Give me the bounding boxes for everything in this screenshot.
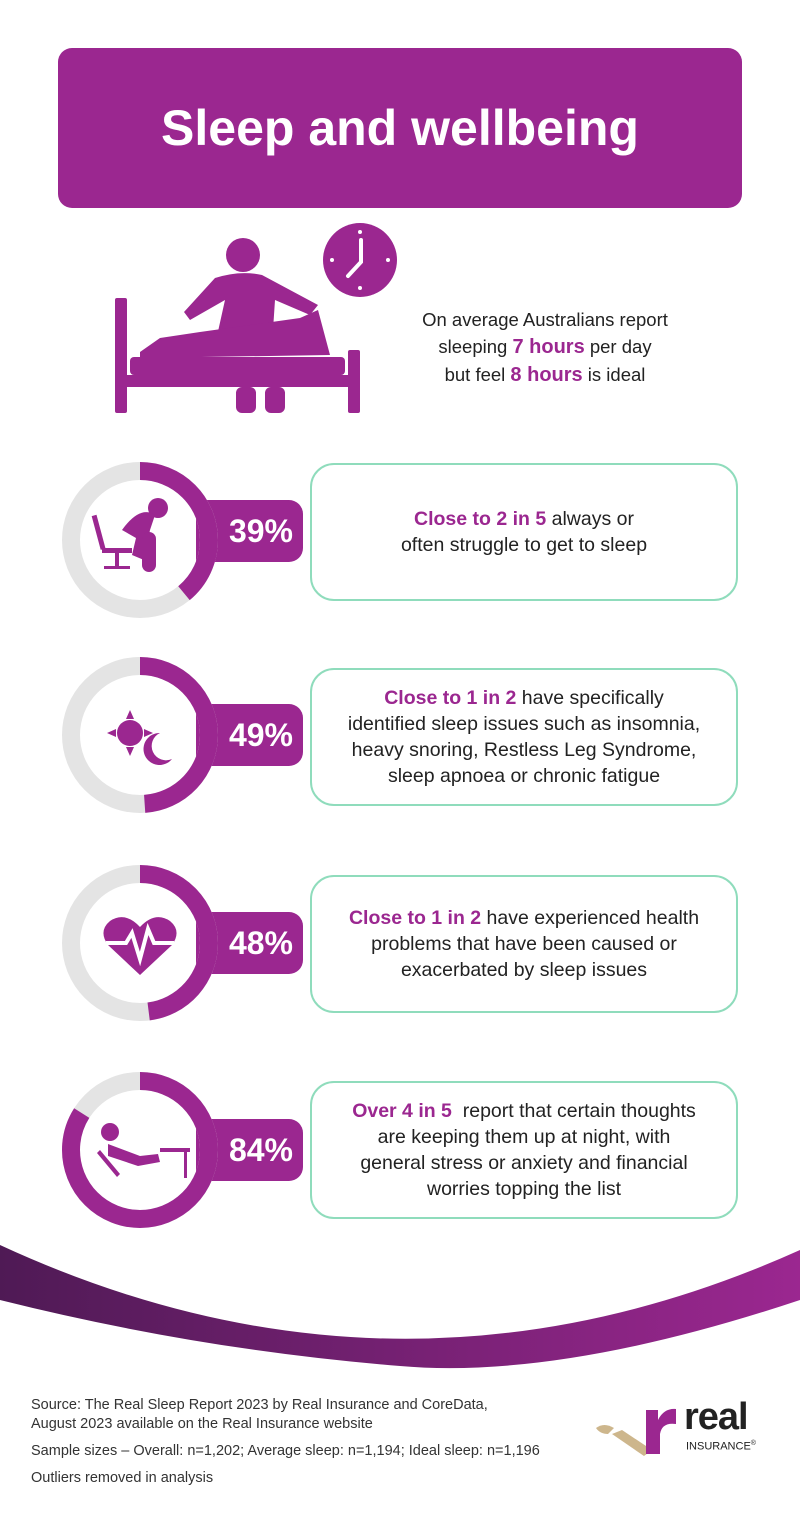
logo: real insurance	[596, 1396, 756, 1456]
logo: real insurance: real	[684, 1396, 748, 1438]
callout box 4: Over 4 in 5 report that certain thoughts	[352, 1100, 696, 1122]
pill: 84%	[196, 1119, 303, 1181]
source text: Sample sizes – Overall: n=1,202; Average sleep: n=1,194; Ideal sleep: n=1,196	[31, 1443, 540, 1459]
source text: Source: The Real Sleep Report 2023 by Real Insurance and CoreData,	[31, 1397, 488, 1413]
callout box 2: identified sleep issues such as insomnia,	[348, 713, 700, 735]
donut chart 39%	[62, 462, 218, 618]
callout box 2: Close to 1 in 2 have specifically	[384, 687, 664, 709]
decorative swoosh	[0, 1245, 800, 1368]
callout box 3	[310, 875, 738, 1013]
callout box 2	[310, 668, 738, 806]
row 1: 39%	[62, 462, 303, 618]
callout box 4: are keeping them up at night, with	[378, 1126, 670, 1148]
donut chart 84% with reclining person icon	[62, 1072, 218, 1228]
source text: August 2023 available on the Real Insurance website	[31, 1416, 373, 1432]
icon: person making bed with clock	[115, 223, 397, 413]
row 4: 84%	[62, 1072, 303, 1228]
pill: 49%: 49%	[229, 716, 293, 752]
source text	[31, 1397, 540, 1486]
callout box 1: Close to 2 in 5 always or	[414, 508, 634, 530]
callout box 3: Close to 1 in 2 have experienced health	[349, 907, 699, 929]
source text: Outliers removed in analysis	[31, 1470, 213, 1486]
callout box 4	[310, 1081, 738, 1219]
title banner: Sleep and wellbeing	[161, 100, 639, 156]
text: average sleep: but feel 8 hours is ideal	[445, 364, 645, 386]
callout box 4: general stress or anxiety and financial	[360, 1152, 688, 1174]
logo: real insurance: INSURANCE®	[686, 1440, 756, 1453]
pill: 48%	[196, 912, 303, 974]
pill: 39%	[196, 500, 303, 562]
donut chart 49% with sun/moon icon	[62, 657, 218, 813]
pill: 48%: 48%	[229, 924, 293, 960]
donut chart 48% with heart icon	[62, 865, 218, 1021]
text: average sleep: On average Australians report	[422, 309, 668, 330]
callout box 3: exacerbated by sleep issues	[401, 959, 647, 981]
pill: 49%	[196, 704, 303, 766]
callout box 4: worries topping the list	[427, 1178, 621, 1200]
text: average sleep: sleeping 7 hours per day	[438, 336, 652, 358]
row 3: 48%	[62, 865, 303, 1021]
callout box 3: problems that have been caused or	[371, 933, 677, 955]
callout box 2: sleep apnoea or chronic fatigue	[388, 765, 660, 787]
text: average sleep	[422, 309, 668, 386]
pill: 84%: 84%	[229, 1132, 293, 1168]
callout box 1	[310, 463, 738, 601]
title banner	[58, 48, 742, 208]
callout box 1: often struggle to get to sleep	[401, 534, 647, 556]
callout box 2: heavy snoring, Restless Leg Syndrome,	[352, 739, 696, 761]
row 2: 49%	[62, 657, 303, 813]
pill: 39%: 39%	[229, 512, 293, 548]
